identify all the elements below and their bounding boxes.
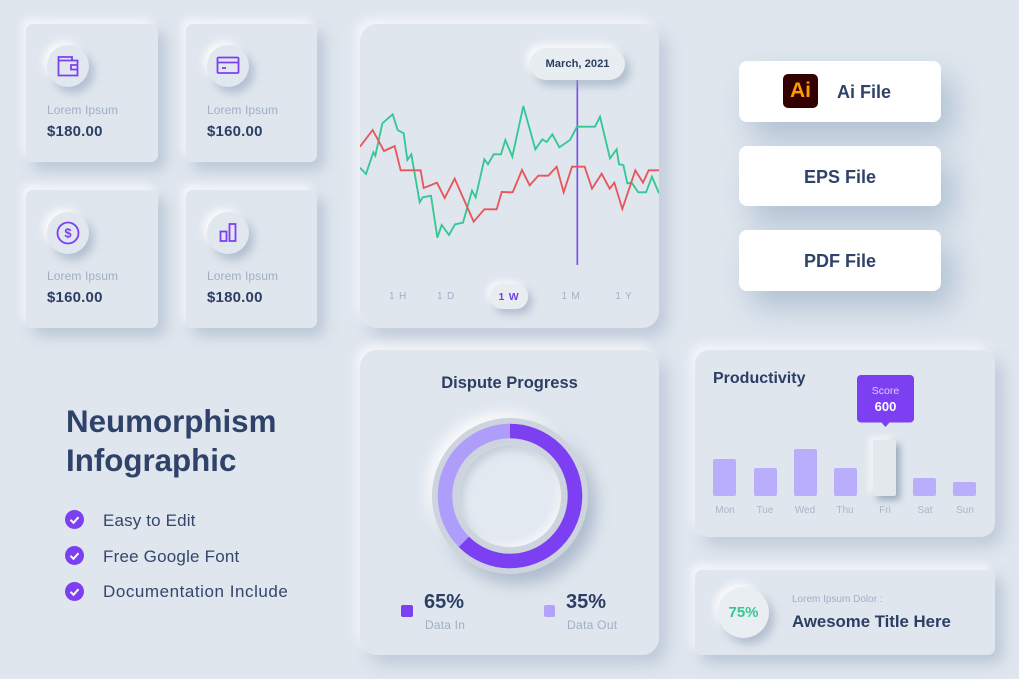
legend value: data in: 65% xyxy=(424,591,464,613)
check icon xyxy=(65,582,84,601)
panel: line chart xyxy=(360,24,659,328)
legend label: data in: Data In xyxy=(425,618,465,632)
icon: dollar coin: $ xyxy=(64,226,72,240)
green series xyxy=(360,106,659,238)
timeframe 1D: 1 D xyxy=(437,291,455,302)
icon: Adobe Illustrator: Ai xyxy=(790,79,811,102)
label: Lorem Ipsum xyxy=(207,269,278,283)
timeframe 1M: 1 M xyxy=(561,291,581,302)
stat card: bars xyxy=(186,190,317,328)
timeframe 1W selected xyxy=(490,284,528,309)
bar Thu xyxy=(834,468,857,496)
bar Tue xyxy=(754,468,777,496)
date pill: March, 2021 xyxy=(545,58,610,70)
value: $180.00 xyxy=(207,289,263,306)
bar Sun xyxy=(953,482,976,496)
feature text: Free Google Font xyxy=(103,547,239,566)
value: $160.00 xyxy=(47,289,103,306)
donut chart xyxy=(432,418,588,574)
label: Lorem Ipsum xyxy=(47,103,118,117)
check icon xyxy=(65,510,84,529)
tooltip label: Score xyxy=(872,385,899,397)
inner hole shading xyxy=(459,445,561,547)
bar Sat xyxy=(913,478,936,496)
stat card: wallet xyxy=(26,24,158,162)
stat card: credit card xyxy=(186,24,317,162)
line chart xyxy=(360,80,659,265)
title: Neumorphism xyxy=(66,404,276,439)
title xyxy=(66,404,276,478)
bar Fri highlighted xyxy=(873,440,896,496)
day Wed: Wed xyxy=(795,505,815,516)
feature list xyxy=(65,510,288,601)
feature text: Documentation Include xyxy=(103,582,288,601)
check icon xyxy=(65,546,84,565)
red series xyxy=(360,130,659,222)
percent circle xyxy=(718,587,769,638)
label: Ai File xyxy=(837,82,891,102)
icon: credit card xyxy=(207,45,249,87)
label: PDF File xyxy=(804,251,876,271)
cursor line xyxy=(575,77,580,265)
legend swatch: data in xyxy=(401,605,413,617)
day Thu: Thu xyxy=(836,505,854,516)
tooltip shape xyxy=(857,375,914,427)
percent circle: 75% xyxy=(728,604,759,621)
data out arc xyxy=(445,431,575,561)
label: Lorem Ipsum xyxy=(47,269,118,283)
feature text: Easy to Edit xyxy=(103,511,196,530)
small label: Lorem Ipsum Dolor : xyxy=(792,594,883,605)
bar Wed xyxy=(794,449,817,496)
day Tue: Tue xyxy=(757,505,773,516)
bar Mon xyxy=(713,459,736,496)
tooltip value: 600 xyxy=(875,399,896,414)
label: Lorem Ipsum xyxy=(207,103,278,117)
title: Infographic xyxy=(66,443,236,478)
icon: Adobe Illustrator xyxy=(783,74,818,108)
day Sun: Sun xyxy=(956,505,974,516)
panel: awesome title xyxy=(695,570,995,655)
icon: dollar coin xyxy=(47,212,89,254)
day Mon: Mon xyxy=(715,505,735,516)
day Sat: Sat xyxy=(917,505,932,516)
date pill xyxy=(530,48,625,80)
value: $180.00 xyxy=(47,123,103,140)
day Fri: Fri xyxy=(879,505,891,516)
timeframe 1Y: 1 Y xyxy=(615,291,633,302)
timeframe 1W selected: 1 W xyxy=(498,291,520,303)
value: $160.00 xyxy=(207,123,263,140)
icon: wallet xyxy=(47,45,89,87)
icon: bar chart xyxy=(207,212,249,254)
legend value: data out: 35% xyxy=(566,591,606,613)
data in arc xyxy=(445,431,575,561)
file button: PDF xyxy=(739,230,941,291)
timeframe 1H: 1 H xyxy=(389,291,407,302)
heading: Dispute Progress xyxy=(441,374,578,392)
file button: EPS xyxy=(739,146,941,206)
stat card: dollar xyxy=(26,190,158,328)
panel: dispute progress xyxy=(360,350,659,655)
label: EPS File xyxy=(804,167,876,187)
legend swatch: data out xyxy=(544,605,555,617)
panel: productivity xyxy=(695,350,995,537)
legend label: data out: Data Out xyxy=(567,618,617,632)
productivity heading: Productivity xyxy=(713,370,805,387)
title text: Awesome Title Here xyxy=(792,612,951,631)
inner hole xyxy=(456,442,564,550)
file button: Ai xyxy=(739,61,941,122)
score tooltip xyxy=(857,375,914,427)
